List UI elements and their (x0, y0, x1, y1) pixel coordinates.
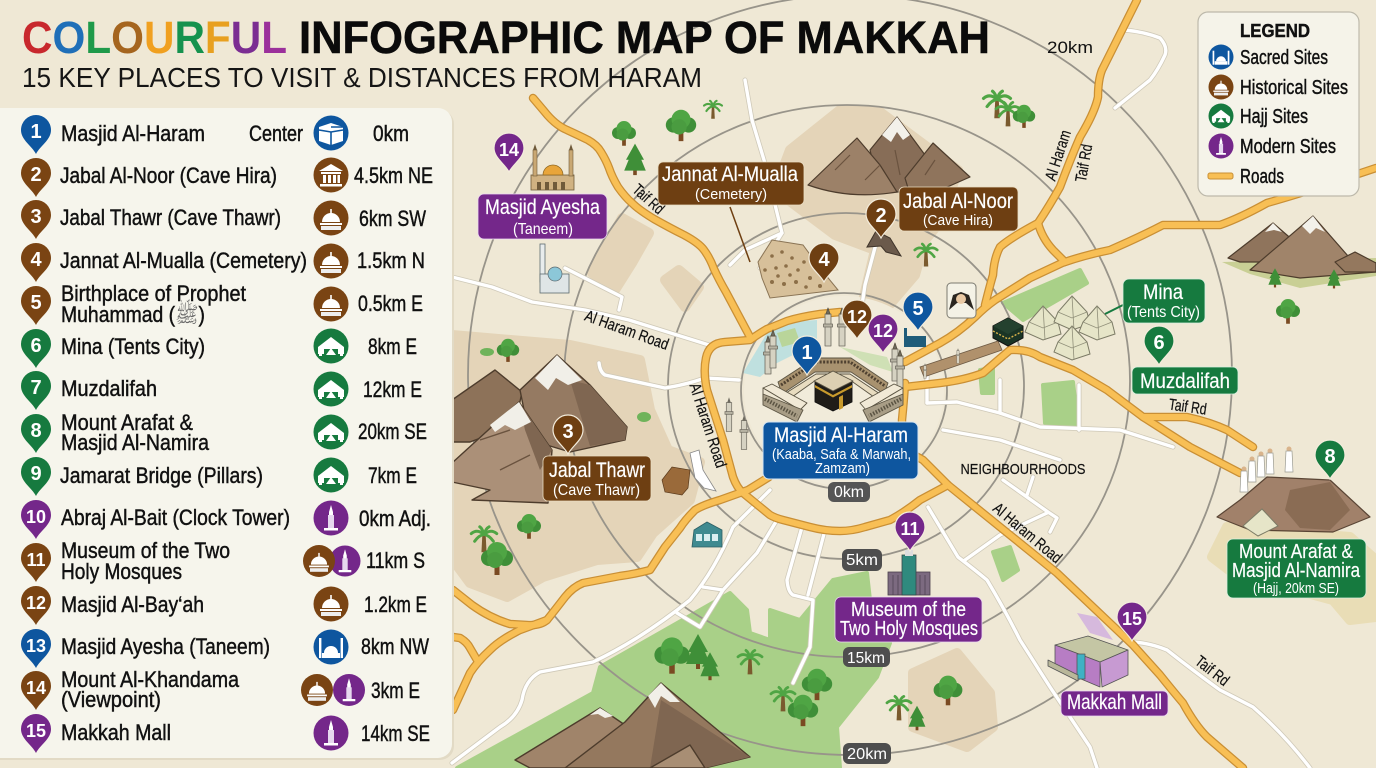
row 4 (21, 243, 425, 282)
row 15 (21, 714, 430, 753)
road and area labels: Taif Rd (1073, 143, 1096, 183)
row 8 (21, 410, 427, 455)
road and area labels: Taif Rd (1168, 396, 1208, 419)
row 9 (21, 457, 417, 496)
row 10 (21, 500, 431, 539)
legend: Historical Sites (1240, 77, 1348, 99)
Makkah Mall building (1048, 636, 1128, 687)
Jamarat Bridge (920, 341, 1002, 378)
distance rings (468, 0, 1232, 755)
map pins: 4 (818, 249, 830, 271)
row 3 (21, 200, 426, 239)
map pins: 12 (873, 321, 893, 341)
title: COLOURFUL (22, 12, 287, 63)
map pins: 5 (912, 298, 924, 320)
label: Jannat Al-Mualla: Jannat Al-Mualla (662, 163, 798, 186)
row 8: Mount Arafat & (61, 410, 193, 435)
row 14: Mount Al-Khandama (61, 667, 240, 692)
row 15: 15 (26, 721, 46, 741)
label: Jabal Thawr: Jabal Thawr (549, 459, 645, 482)
label: Mina: Mina (1143, 281, 1183, 304)
row 5: 5 (30, 292, 42, 314)
road and area labels (582, 38, 1232, 690)
label: Jannat Al-Mualla (658, 162, 804, 205)
row 10: 0km Adj. (359, 506, 431, 531)
row 8: 20km SE (358, 419, 427, 444)
legend: Hajj Sites (1240, 106, 1308, 128)
label: Museum of the Two Holy Mosques (835, 597, 982, 642)
row 14: 3km E (371, 678, 420, 703)
label: Mina (1123, 279, 1205, 323)
label: Jabal Thawr: (Cave Thawr) (553, 482, 640, 499)
title: INFOGRAPHIC MAP OF MAKKAH (299, 12, 990, 63)
row 3: Jabal Thawr (Cave Thawr) (60, 205, 281, 230)
left index panel (0, 108, 454, 760)
Mina tent city with small Kaaba (993, 296, 1123, 360)
row 1: Center (249, 121, 303, 146)
Mount Arafat hill with pilgrims (1217, 446, 1370, 536)
row 5: Muhammad (ﷺ) (61, 298, 205, 328)
label: Jannat Al-Mualla: (Cemetery) (695, 186, 767, 203)
row 13: Masjid Ayesha (Taneem) (61, 634, 270, 659)
distance pills: 20km (847, 746, 887, 763)
row 4: Jannat Al-Mualla (Cemetery) (60, 248, 307, 273)
trees and palms (471, 91, 1341, 730)
row 11 (21, 538, 425, 584)
Masjid Ayesha illustrations (531, 144, 574, 293)
road and area labels: Al Haram Road (686, 381, 729, 470)
row 12 (21, 586, 427, 625)
white local roads (452, 30, 1310, 768)
row 14: (Viewpoint) (61, 687, 161, 712)
row 2: 2 (30, 164, 42, 186)
row 2: 4.5km NE (354, 163, 433, 188)
label: Masjid Ayesha: Masjid Ayesha (485, 196, 600, 219)
label: Masjid Al-Haram (763, 422, 918, 479)
Birthplace of the Prophet icon and site (904, 283, 976, 347)
map pins: 3 (562, 421, 574, 443)
row 11: 11 (26, 550, 46, 570)
row 12: Masjid Al-Bay‘ah (61, 592, 204, 617)
road and area labels: Taif Rd (1192, 653, 1232, 690)
row 1: 1 (30, 121, 42, 143)
legend: Sacred Sites (1240, 47, 1328, 69)
row 4: 4 (30, 249, 42, 271)
row 1: 0km (373, 121, 409, 146)
label: Museum of the Two Holy Mosques: Two Holy Mosques (840, 618, 978, 640)
row 14: 14 (26, 678, 46, 698)
legend (1198, 12, 1359, 196)
row 6: 8km E (368, 334, 417, 359)
row 10: 10 (26, 507, 46, 527)
row 9: Jamarat Bridge (Pillars) (60, 463, 263, 488)
distance pills: 5km (846, 552, 878, 569)
map pins: 8 (1324, 446, 1336, 468)
title (22, 12, 990, 63)
map pins: 15 (1122, 609, 1142, 629)
label: Mount Arafat (1227, 539, 1366, 598)
mountain: Jabal Al-Noor (808, 117, 970, 195)
label: Mina: (Tents City) (1127, 304, 1200, 321)
row 7: 12km E (363, 377, 422, 402)
legend: Roads (1240, 166, 1284, 188)
Kaaba (814, 371, 853, 411)
row 11: Holy Mosques (61, 559, 182, 584)
subtitle: 15 KEY PLACES TO VISIT & DISTANCES FROM HARAM (22, 62, 702, 93)
map pins: 2 (875, 205, 887, 227)
legend: LEGEND (1240, 21, 1310, 41)
row 5 (21, 281, 423, 328)
row 9: 9 (30, 463, 42, 485)
row 14 (21, 667, 420, 712)
label: Masjid Al-Haram: Zamzam) (815, 460, 870, 477)
row 8: 8 (30, 420, 42, 442)
distance pills: 0km (834, 484, 864, 501)
road and area labels: NEIGHBOURHOODS (960, 461, 1086, 478)
map pins (494, 133, 1345, 641)
row 4: 1.5km N (357, 248, 425, 273)
row 12: 1.2km E (364, 592, 427, 617)
row 7 (21, 371, 422, 410)
distance pills: 15km (847, 650, 885, 667)
row 5: 0.5km E (358, 291, 423, 316)
row 7: Muzdalifah (61, 376, 157, 401)
label: Mount Arafat: Mount Arafat & (1239, 541, 1354, 563)
row 13 (21, 629, 429, 668)
row 5: Birthplace of Prophet (61, 281, 246, 306)
row 12: 12 (26, 593, 46, 613)
label: Jabal Al-Noor: Jabal Al-Noor (903, 190, 1013, 213)
label: Masjid Al-Haram: (Kaaba, Safa & Marwah, (772, 446, 911, 463)
row 7: 7 (30, 377, 42, 399)
row 11: 11km S (366, 548, 425, 573)
row 2: Jabal Al-Noor (Cave Hira) (60, 163, 277, 188)
row 6: Mina (Tents City) (61, 334, 205, 359)
label: Muzdalifah: Muzdalifah (1140, 370, 1230, 393)
Jannat Al-Mualla cemetery (730, 207, 838, 298)
cave Hira (867, 231, 901, 256)
Museum of the Two Holy Mosques building (888, 550, 930, 595)
row 13: 13 (26, 636, 46, 656)
map pins: 14 (499, 140, 519, 160)
label: Masjid Ayesha: (Taneem) (513, 221, 573, 238)
row 1: Masjid Al-Haram (61, 121, 205, 146)
row 9: 7km E (368, 463, 417, 488)
road and area labels: Al Haram Road (582, 308, 671, 354)
row 13: 8km NW (361, 634, 429, 659)
row 8: Masjid Al-Namira (61, 430, 210, 455)
map pins: 12 (847, 307, 867, 327)
row 3: 6km SW (359, 206, 426, 231)
mountain: top right (1222, 216, 1376, 288)
label: Masjid Ayesha (478, 194, 607, 239)
map pins: 11 (900, 519, 920, 539)
main orange roads (453, 0, 1376, 768)
label: Masjid Al-Haram: Masjid Al-Haram (774, 424, 908, 447)
row 3: 3 (30, 206, 42, 228)
row 2 (21, 158, 433, 197)
road and area labels: Al Haram (1043, 128, 1075, 183)
label: Jabal Al-Noor: (Cave Hira) (923, 212, 993, 229)
row 15: Makkah Mall (61, 720, 171, 745)
pilgrims, camel and minarets near Al Haram Road (662, 397, 748, 547)
map pins: 6 (1153, 332, 1165, 354)
road and area labels: Al Haram Road (989, 500, 1065, 567)
label: Museum of the Two Holy Mosques: Museum of the (851, 599, 966, 621)
label: Jabal Thawr (543, 456, 651, 501)
legend: Modern Sites (1240, 136, 1336, 158)
distance pills (828, 482, 891, 764)
road and area labels: Taif Rd (629, 181, 667, 218)
map pins: 1 (801, 342, 813, 364)
mountain: bottom (515, 683, 750, 768)
row 6 (21, 328, 417, 368)
row 15: 14km SE (361, 721, 430, 746)
row 1 (21, 115, 409, 154)
row 11: Museum of the Two (61, 538, 230, 563)
label: Jabal Al-Noor (899, 187, 1018, 231)
row 6: 6 (30, 335, 42, 357)
label: Mount Arafat: (Hajj, 20km SE) (1253, 580, 1339, 597)
row 10: Abraj Al-Bait (Clock Tower) (61, 505, 290, 530)
mountain: Jabal Thawr (452, 355, 627, 503)
road and area labels: 20km (1047, 38, 1093, 57)
Masjid Al-Haram complex with Kaaba (763, 308, 904, 422)
label: Makkah Mall: Makkah Mall (1067, 691, 1162, 714)
